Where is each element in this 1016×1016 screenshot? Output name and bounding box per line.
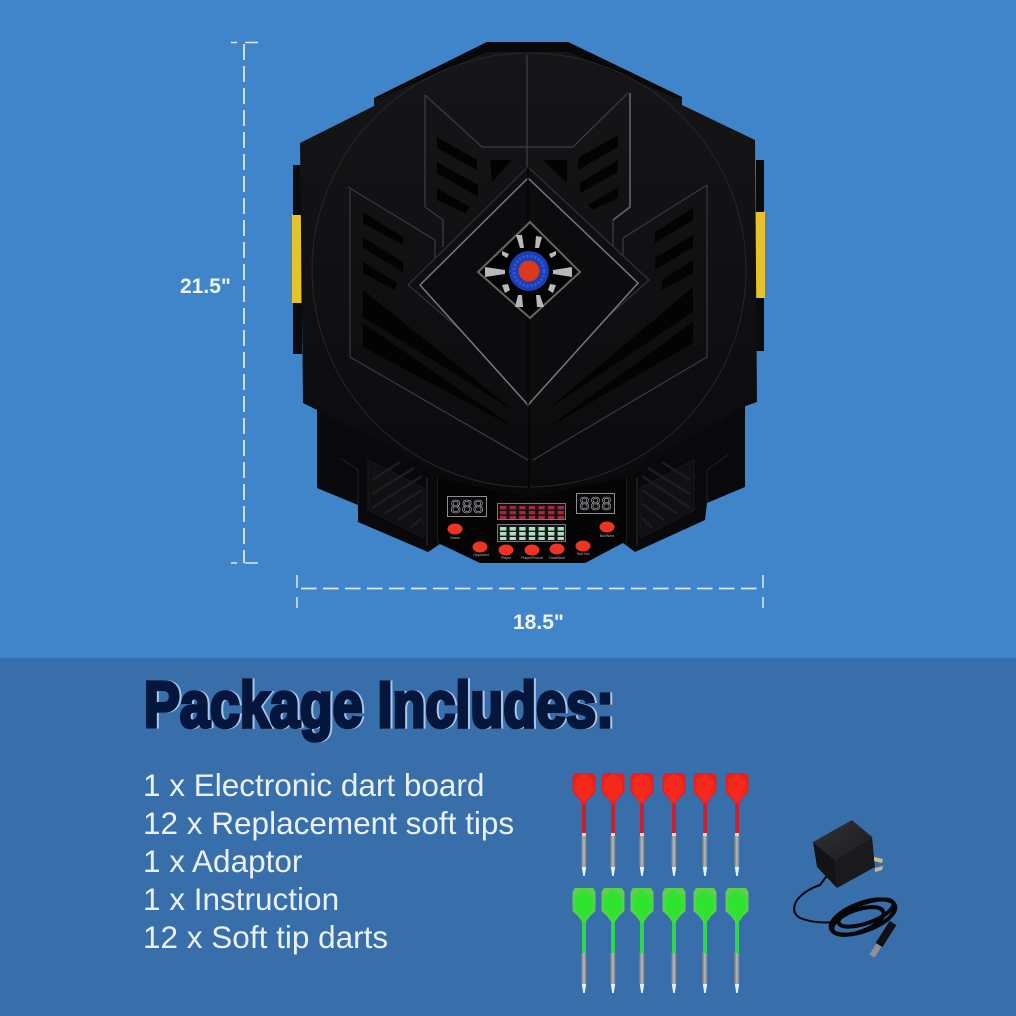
- upper right vents: [543, 135, 618, 210]
- button captions: Player: [501, 556, 512, 560]
- right side handle: [755, 160, 765, 351]
- width dimension line: [297, 575, 763, 608]
- left foot pad: [368, 460, 424, 538]
- power adaptor: [794, 820, 900, 956]
- button captions: Sub Hol: [577, 552, 590, 556]
- package contents list: 1 x Instruction: [143, 881, 339, 917]
- width label: 18.5": [513, 611, 564, 634]
- adaptor cable: [794, 877, 900, 942]
- left side handle: [292, 165, 302, 354]
- adaptor body: [813, 842, 837, 888]
- adaptor plug: [879, 923, 893, 945]
- lower left vents: [363, 212, 515, 428]
- target bullseye: [509, 251, 549, 291]
- right foot pad: [640, 460, 694, 538]
- package contents list: 1 x Electronic dart board: [143, 767, 484, 803]
- green darts row: [572, 888, 748, 993]
- target window: [478, 222, 580, 318]
- upper left vents: [437, 137, 512, 213]
- bevel lines on board: [312, 53, 746, 488]
- central diamond frame: [408, 167, 649, 405]
- button captions: Opponent: [473, 553, 489, 557]
- left score display: 888: [450, 497, 484, 519]
- button captions: [450, 534, 614, 560]
- background: upper blue area: [0, 0, 1016, 658]
- height dimension line: [231, 42, 258, 563]
- package contents list: 12 x Replacement soft tips: [143, 805, 514, 841]
- button captions: Player/Round: [521, 556, 543, 560]
- heading: Package Includes: Package Includes:: [144, 668, 614, 741]
- height label: 21.5": [180, 275, 231, 298]
- lower right vents: [547, 208, 693, 428]
- button captions: Game: [450, 536, 460, 540]
- button captions: Bull/Next: [600, 534, 614, 538]
- package contents list: 1 x Adaptor: [143, 843, 302, 879]
- red darts row: [572, 773, 748, 876]
- green score matrix: [498, 524, 566, 542]
- package contents list: [143, 767, 514, 955]
- right score display: 888: [579, 494, 612, 516]
- dart board product: [292, 42, 765, 563]
- red score matrix: [498, 504, 566, 520]
- adaptor prongs: [874, 857, 883, 872]
- board shell: [300, 42, 757, 488]
- background: lower package band: [0, 658, 1016, 1016]
- button captions: Hold/Next: [549, 556, 565, 560]
- target spokes: [485, 235, 572, 307]
- package contents list: 12 x Soft tip darts: [143, 919, 388, 955]
- control buttons: [448, 522, 614, 556]
- lower tray: [317, 395, 745, 563]
- electronic control panel: [438, 478, 626, 563]
